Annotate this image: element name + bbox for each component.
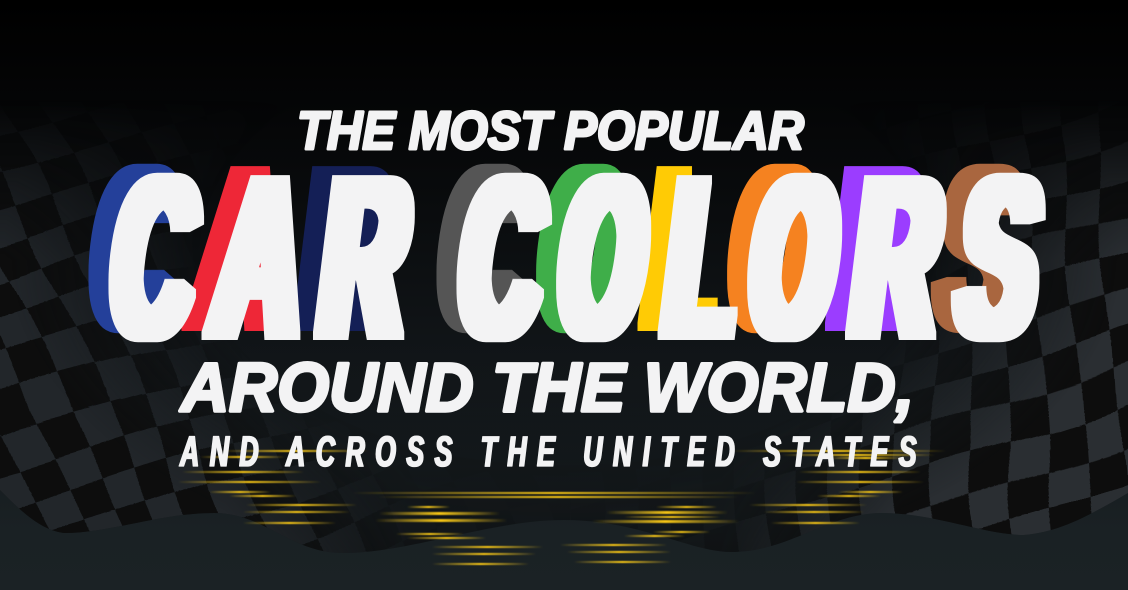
coloured letter shadows: C (80, 122, 190, 376)
coloured letter shadows: A (182, 120, 299, 376)
heading: car colors (100, 129, 1053, 385)
heading: car colors: C (100, 131, 210, 385)
heading: car colors: C (448, 131, 558, 385)
heading: car colors: R (841, 131, 954, 385)
heading: around the world: AROUND THE WORLD, (179, 349, 914, 426)
subheading: across the united states: AND ACROSS THE UNITED STATES (179, 428, 917, 476)
coloured letter shadows: C (428, 122, 538, 376)
right checkered flag (766, 134, 1128, 547)
heading: car colors: O (548, 130, 660, 385)
checkered flags (0, 134, 1128, 552)
coloured letter shadows: R (289, 122, 402, 376)
coloured letter shadows (80, 120, 1033, 376)
coloured letter shadows: S (926, 122, 1033, 376)
heading: car colors: O (739, 130, 851, 385)
coloured letter shadows: L (633, 122, 734, 376)
heading: car colors: S (946, 131, 1053, 385)
coloured letter shadows: O (528, 121, 640, 376)
coloured letter shadows: R (821, 122, 934, 376)
coloured letter shadows: O (719, 121, 831, 376)
heading: car colors: R (309, 131, 422, 385)
heading: the most popular: THE MOST POPULAR (297, 101, 804, 161)
heading: car colors: L (653, 131, 754, 385)
heading: car colors: A (202, 129, 319, 385)
speed lines (178, 450, 946, 565)
left checkered flag (0, 140, 342, 552)
